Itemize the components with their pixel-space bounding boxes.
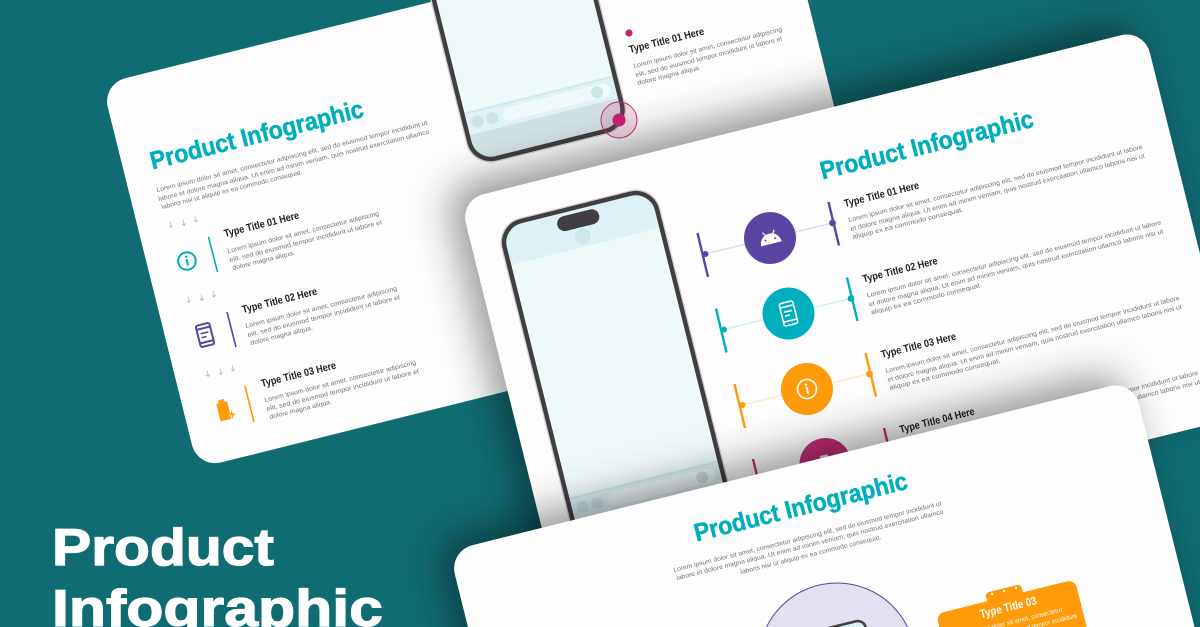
connector: [724, 298, 850, 330]
panel: back slide with three items: [102, 0, 882, 468]
callout text: type title 01: [625, 26, 783, 87]
item text: dolore magna aliqua.: [269, 399, 333, 421]
panel: front slide: [449, 380, 1200, 627]
item text: Lorem ipsum dolor sit amet, consectetur adipiscing elit, sed do eiusmod tempor incididunt ut labore: [885, 295, 1181, 375]
intro text block: Lorem ipsum dolor sit amet, consectetur adipiscing elit, sed do eiusmod tempor incididunt ut: [156, 120, 428, 194]
card tab: [985, 584, 1027, 616]
right bar: [866, 353, 876, 396]
phone mockup: back slide: [430, 0, 626, 162]
slide card: [460, 29, 1200, 587]
item text: elit, sed do eiusmod tempor incididunt ut labore et: [229, 219, 383, 264]
icon: arrows: [206, 365, 235, 376]
left bar: [716, 308, 727, 352]
icon circle: phone: [762, 288, 814, 340]
panel: middle slide with four items: [465, 34, 1200, 528]
item title: Type Title 01 Here: [223, 210, 301, 240]
item 03: info: [734, 295, 1183, 428]
callout text: type title 01: dolore magna aliqua.: [637, 64, 702, 87]
right bar: [828, 202, 839, 246]
right bar: [884, 428, 894, 472]
icon circle: info: [781, 363, 833, 415]
item text: dolore magna aliqua.: [232, 250, 296, 272]
card title: Type Title 03: [979, 595, 1038, 621]
connector: [742, 374, 869, 405]
item title: Type Title 02 Here: [861, 255, 939, 285]
shadow: middle slide: [445, 19, 1200, 574]
callout text: type title 01: elit, sed do eiusmod tempor incididunt ut labore et: [635, 36, 783, 79]
connector: [705, 223, 832, 254]
item text: [264, 359, 420, 421]
intro text block: labore et dolore magna aliqua. Ut enim ad minim veniam, quis nostrud exercitation ullamco: [158, 129, 431, 203]
item title: Type Title 01 Here: [843, 180, 921, 210]
item text: dolore magna aliqua.: [250, 325, 314, 347]
item 04: battery: [753, 370, 1200, 503]
item text: Lorem ipsum dolor sit amet, consectetur adipiscing: [264, 359, 417, 404]
intro text block: Lorem ipsum dolor sit amet, consectetur adipiscing elit, sed do eiusmod tempor incididunt ut: [673, 500, 943, 574]
item text: [245, 285, 401, 347]
heading: product infographic: Product Infographic: [147, 95, 367, 175]
item text: Lorem ipsum dolor sit amet, consectetur adipiscing elit, sed do eiusmod tempor incididunt ut labore: [848, 144, 1144, 224]
main title: Product: [52, 519, 274, 577]
icon: arrows: [187, 291, 216, 302]
item text: aliquip ex ea commodo consequat.: [870, 282, 983, 316]
circle with phone: [758, 583, 916, 627]
card: type title 03: [936, 579, 1097, 627]
item title: Type Title 03 Here: [260, 360, 338, 390]
icon circle: battery: [800, 438, 852, 490]
left bar: [698, 233, 708, 277]
item text: aliquip ex ea commodo consequat.: [852, 207, 964, 241]
callout text: type title 01: Lorem ipsum dolor sit amet, consectetur adipiscing: [633, 26, 783, 70]
left bar: [734, 384, 746, 428]
phone mockup: middle slide: [500, 190, 728, 521]
item title: Type Title 04 Here: [898, 406, 976, 436]
heading: product infographic: Product Infographic: [691, 467, 911, 547]
item 02: phone: [716, 219, 1164, 352]
shadow: front slide: [434, 370, 1200, 627]
intro text block: labore et dolore magna aliqua. Ut enim ad minim veniam, quis nostrud exercitation ullamco: [676, 509, 945, 582]
divider bar: [208, 237, 218, 272]
item 03: battery: [206, 359, 420, 423]
item text: [227, 210, 383, 272]
item 02: phone: [187, 285, 401, 347]
icon: phone: [196, 323, 214, 347]
callout text: type title 01: Type Title 01 Here: [628, 26, 706, 56]
card body: [936, 579, 1097, 627]
icon: battery: [216, 397, 237, 423]
item text: et dolore magna aliqua. Ut enim ad minim veniam, quis nostrud exercitation ullamco laboris nisi ut: [905, 379, 1200, 459]
item text: elit, sed do eiusmod tempor incididunt ut labore et: [247, 294, 401, 339]
intro text block: laboris nisi ut aliquip ex ea commodo consequat.: [161, 169, 303, 211]
item text: et dolore magna aliqua. Ut enim ad minim veniam, quis nostrud exercitation ullamco laboris nisi ut: [868, 228, 1164, 308]
left bar: [753, 459, 764, 503]
item 01: android: [698, 144, 1146, 277]
item text: Lorem ipsum dolor sit amet, consectetur adipiscing elit, sed do eiusmod tempor incididunt ut labore: [866, 219, 1162, 299]
divider bar: [227, 312, 236, 347]
callout: marker on phone corner: [601, 102, 637, 138]
slide card: [102, 0, 882, 468]
slide card: [449, 380, 1200, 627]
item text: aliquip ex ea commodo consequat.: [889, 358, 1001, 392]
icon circle: android: [744, 212, 796, 264]
item title: Type Title 02 Here: [241, 286, 319, 316]
main title: [52, 519, 383, 627]
item 01: info: [169, 210, 383, 272]
item text: et dolore magna aliqua. Ut enim ad minim veniam, quis nostrud exercitation ullamco laboris nisi ut: [850, 153, 1146, 233]
item text: Lorem ipsum dolor sit amet, consectetur adipiscing: [227, 210, 380, 255]
item text: et dolore magna aliqua. Ut enim ad minim veniam, quis nostrud exercitation ullamco laboris nisi ut: [887, 304, 1183, 384]
divider bar: [245, 386, 254, 422]
item text: elit, sed do eiusmod tempor incididunt ut labore et: [266, 368, 420, 413]
item text: Lorem ipsum dolor sit amet, consectetur adipiscing: [245, 285, 398, 330]
intro text block: laboris nisi ut aliquip ex ea commodo consequat.: [740, 534, 882, 576]
heading: product infographic: Product Infographic: [817, 105, 1037, 185]
right bar: [847, 278, 858, 321]
icon: info circle: [178, 252, 196, 270]
icon: arrows: [169, 216, 198, 228]
item title: Type Title 03 Here: [880, 331, 958, 361]
item text: Lorem ipsum dolor sit amet, consectetur adipiscing elit, sed do eiusmod tempor incididunt ut labore: [903, 370, 1199, 450]
